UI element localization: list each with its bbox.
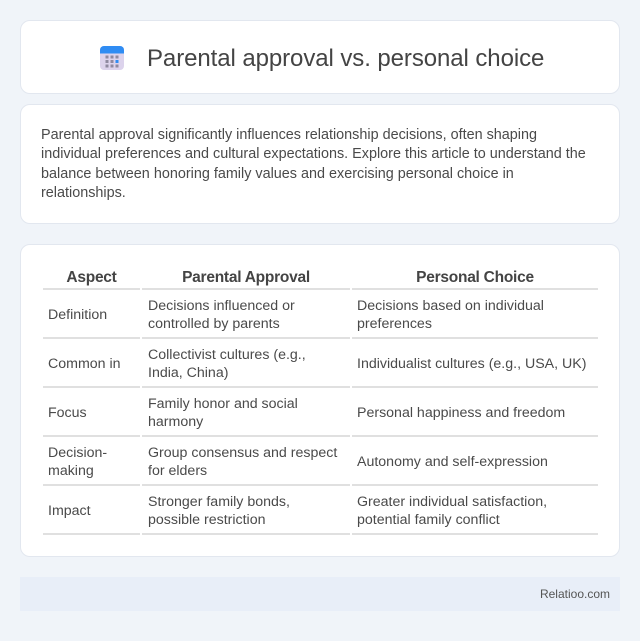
footer bar (20, 577, 620, 611)
footer text: Relatioo.com (540, 587, 610, 601)
comparison table: harmony (148, 414, 203, 430)
row: Focus: Focus (48, 405, 87, 421)
comparison table: controlled by parents (148, 316, 280, 332)
intro text: balance between honoring family values and exercising personal choice in (41, 166, 514, 182)
comparison table: Personal happiness and freedom (357, 405, 565, 421)
intro text: relationships. (41, 185, 126, 201)
title: Parental approval vs. personal choice (147, 45, 544, 72)
panel: intro text card (20, 104, 620, 224)
row: Decision-making: making (48, 463, 94, 479)
comparison table: Decisions based on individual (357, 298, 544, 314)
header: Personal Choice: Personal Choice (416, 269, 534, 286)
header: Aspect: Aspect (66, 269, 117, 286)
comparison table: for elders (148, 463, 207, 479)
row: Decision-making (48, 445, 107, 479)
comparison table: Family honor and social (148, 396, 298, 412)
header: Parental Approval: Parental Approval (182, 269, 310, 286)
row: Impact: Impact (48, 503, 91, 519)
icon: calendar (100, 46, 124, 70)
comparison table: Individualist cultures (e.g., USA, UK) (357, 356, 586, 372)
comparison table (43, 269, 598, 535)
row: Common in: Common in (48, 356, 121, 372)
comparison table: Greater individual satisfaction, (357, 494, 547, 510)
comparison table: Decisions influenced or (148, 298, 295, 314)
panel: title card (20, 20, 620, 94)
row: Definition: Definition (48, 307, 107, 323)
comparison table: possible restriction (148, 512, 266, 528)
panel: comparison table card (20, 244, 620, 557)
comparison table: Group consensus and respect (148, 445, 337, 461)
comparison table: potential family conflict (357, 512, 500, 528)
intro text: individual preferences and cultural expectations. Explore this article to understand the (41, 146, 586, 162)
intro text: Parental approval significantly influences relationship decisions, often shaping (41, 127, 537, 143)
intro text (41, 127, 586, 201)
comparison table: India, China) (148, 365, 228, 381)
row: Decision-making: Decision- (48, 445, 107, 461)
comparison table: Collectivist cultures (e.g., (148, 347, 306, 363)
comparison table: Stronger family bonds, (148, 494, 290, 510)
comparison table: Autonomy and self-expression (357, 454, 548, 470)
comparison table: preferences (357, 316, 432, 332)
